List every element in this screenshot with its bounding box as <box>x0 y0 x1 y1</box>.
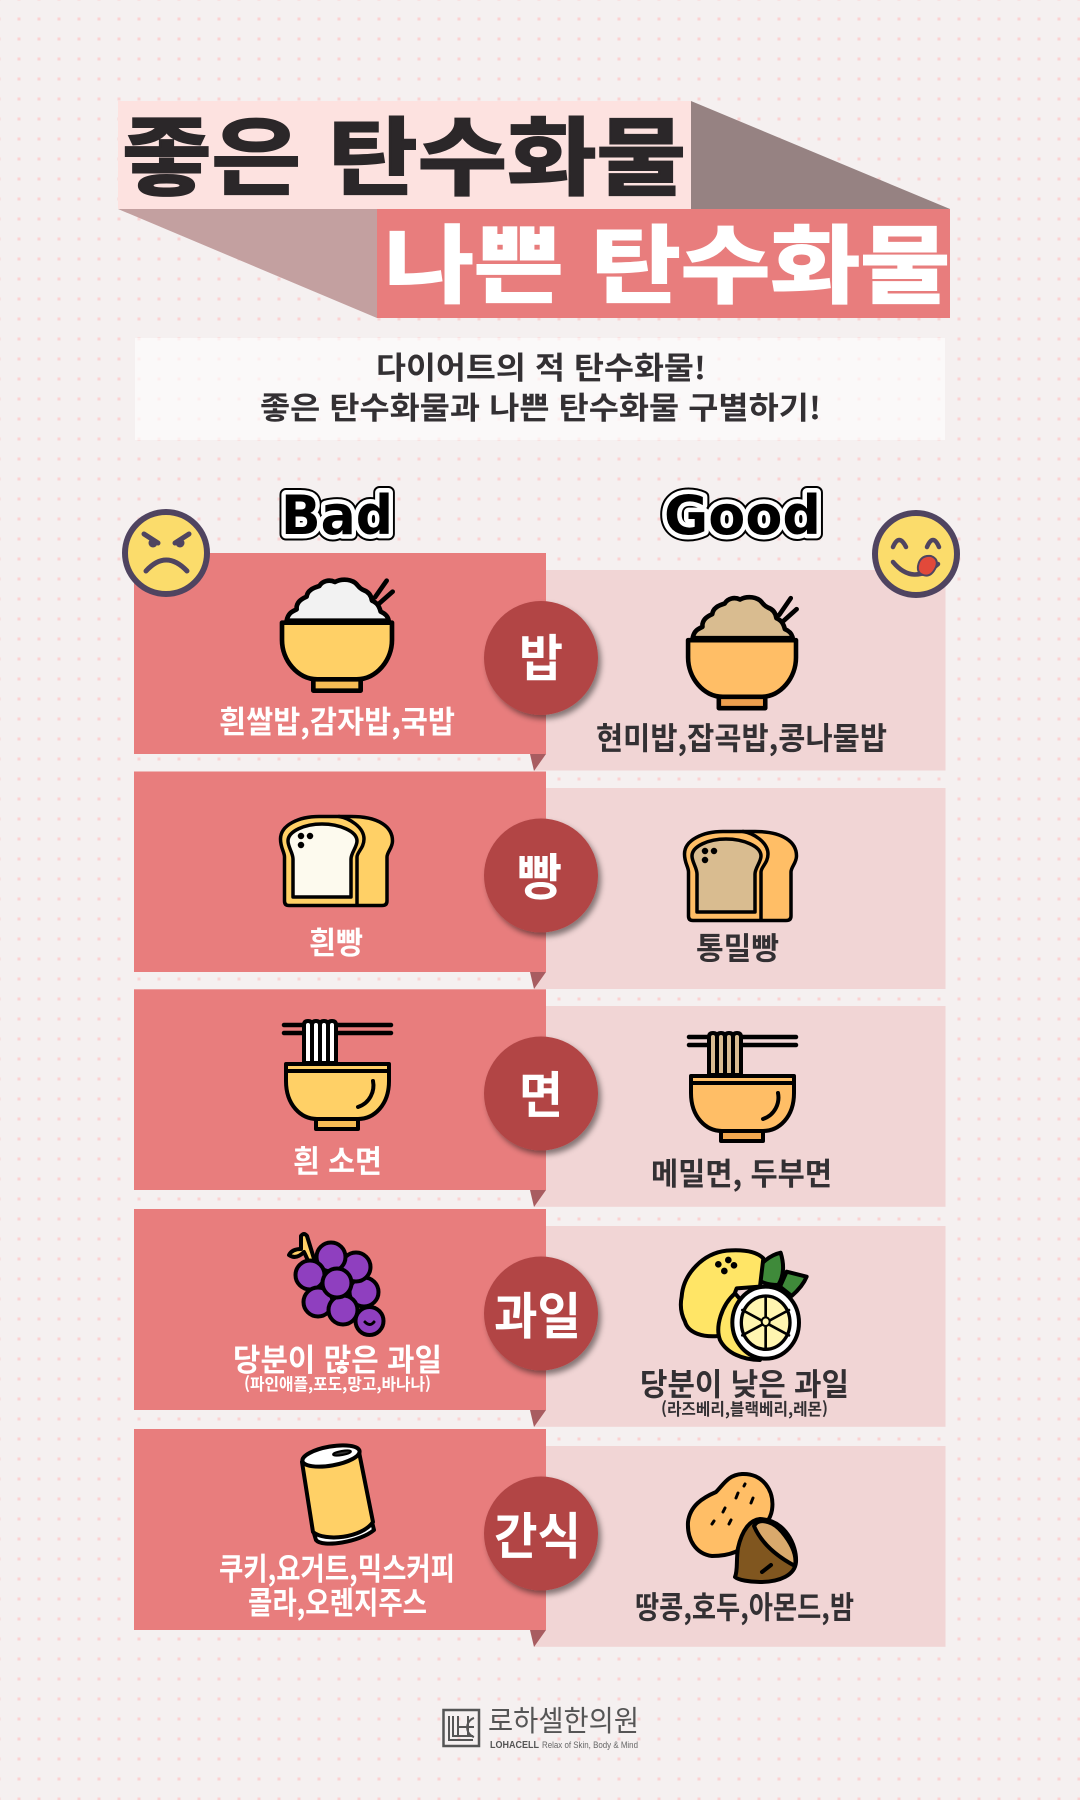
label: good fruit: 당분이 낮은 과일 <box>640 1360 849 1404</box>
icon: grapes <box>289 1234 384 1335</box>
badge: fruit <box>484 1256 598 1370</box>
badge: bread <box>484 818 598 932</box>
label: bad rice: 흰쌀밥,감자밥,국밥 <box>219 697 455 742</box>
logo tagline bold: LOHACELL <box>490 1740 539 1751</box>
panel: bad column row 3 <box>134 989 546 1207</box>
label: good bread: 통밀빵 <box>696 924 779 968</box>
panel: good column row 1 <box>534 570 946 770</box>
icon: yummy face <box>875 513 957 595</box>
label: bad snacks line 1: 쿠키,요거트,믹스커피 <box>219 1544 455 1589</box>
logo mark <box>444 1710 479 1746</box>
icon: buckwheat noodles <box>689 1033 796 1141</box>
badge: bread: 빵 <box>517 838 562 910</box>
title: bad carbohydrates: 나쁜 탄수화물 <box>384 198 950 321</box>
panel: bad column row 1 <box>134 553 546 771</box>
icon: white rice bowl <box>282 580 393 691</box>
badge: snacks <box>484 1476 598 1590</box>
label: good rice: 현미밥,잡곡밥,콩나물밥 <box>596 714 887 758</box>
title: good carbohydrates: 좋은 탄수화물 <box>122 90 686 213</box>
title block <box>118 90 950 321</box>
panel: good column row 5 <box>534 1446 946 1647</box>
logo tagline: Relax of Skin, Body & Mind <box>542 1740 638 1750</box>
panel: good column row 2 <box>534 788 946 989</box>
subtitle panel: 다이어트의 적 탄수화물! <box>376 343 706 388</box>
title shadow: light wedge <box>118 209 377 318</box>
badge: rice <box>484 601 598 715</box>
label: good noodles: 메밀면, 두부면 <box>651 1149 832 1194</box>
icon: white noodles <box>284 1021 391 1129</box>
heading: Bad highlight: Bad <box>281 484 393 547</box>
badge: snacks: 간식 <box>494 1497 581 1569</box>
heading: Good: Good <box>664 484 821 547</box>
icon: brown rice bowl <box>688 597 797 708</box>
panel: bad column row 5 <box>134 1429 546 1647</box>
icon: lemon <box>681 1250 807 1360</box>
title shadow: dark wedge <box>691 101 950 209</box>
label: bad snacks line 2: 콜라,오렌지주스 <box>248 1578 427 1623</box>
label: bad fruit examples: (파인애플,포도,망고,바나나) <box>244 1371 431 1395</box>
heading: Good highlight: Good <box>664 484 821 547</box>
panel: bad column row 2 <box>134 772 546 989</box>
label: good snacks: 땅콩,호두,아몬드,밤 <box>635 1582 854 1628</box>
subtitle panel <box>135 338 945 440</box>
icon: soda can <box>301 1442 374 1544</box>
label: good fruit examples: (라즈베리,블랙베리,레몬) <box>661 1396 828 1420</box>
icon: angry face <box>125 512 207 594</box>
label: bad noodles: 흰 소면 <box>293 1136 382 1182</box>
badge: fruit: 과일 <box>494 1277 581 1349</box>
icon: peanut and chestnut <box>688 1474 796 1582</box>
badge: noodles: 면 <box>519 1056 563 1128</box>
icon: whole wheat bread <box>684 832 796 920</box>
panel: good column row 4 <box>534 1226 946 1427</box>
badge: rice: 밥 <box>519 619 563 691</box>
heading: Bad: Bad <box>281 484 393 547</box>
icon: white bread <box>280 816 392 906</box>
panel: bad column row 4 <box>134 1209 546 1427</box>
label: bad fruit: 당분이 많은 과일 <box>233 1335 442 1380</box>
logo <box>444 1698 639 1751</box>
label: bad bread: 흰빵 <box>309 918 363 963</box>
badge: noodles <box>484 1036 598 1150</box>
subtitle panel: 좋은 탄수화물과 나쁜 탄수화물 구별하기! <box>260 383 821 428</box>
panel: good column row 3 <box>534 1006 946 1207</box>
logo wordmark: 로하셀한의원 <box>488 1698 639 1740</box>
